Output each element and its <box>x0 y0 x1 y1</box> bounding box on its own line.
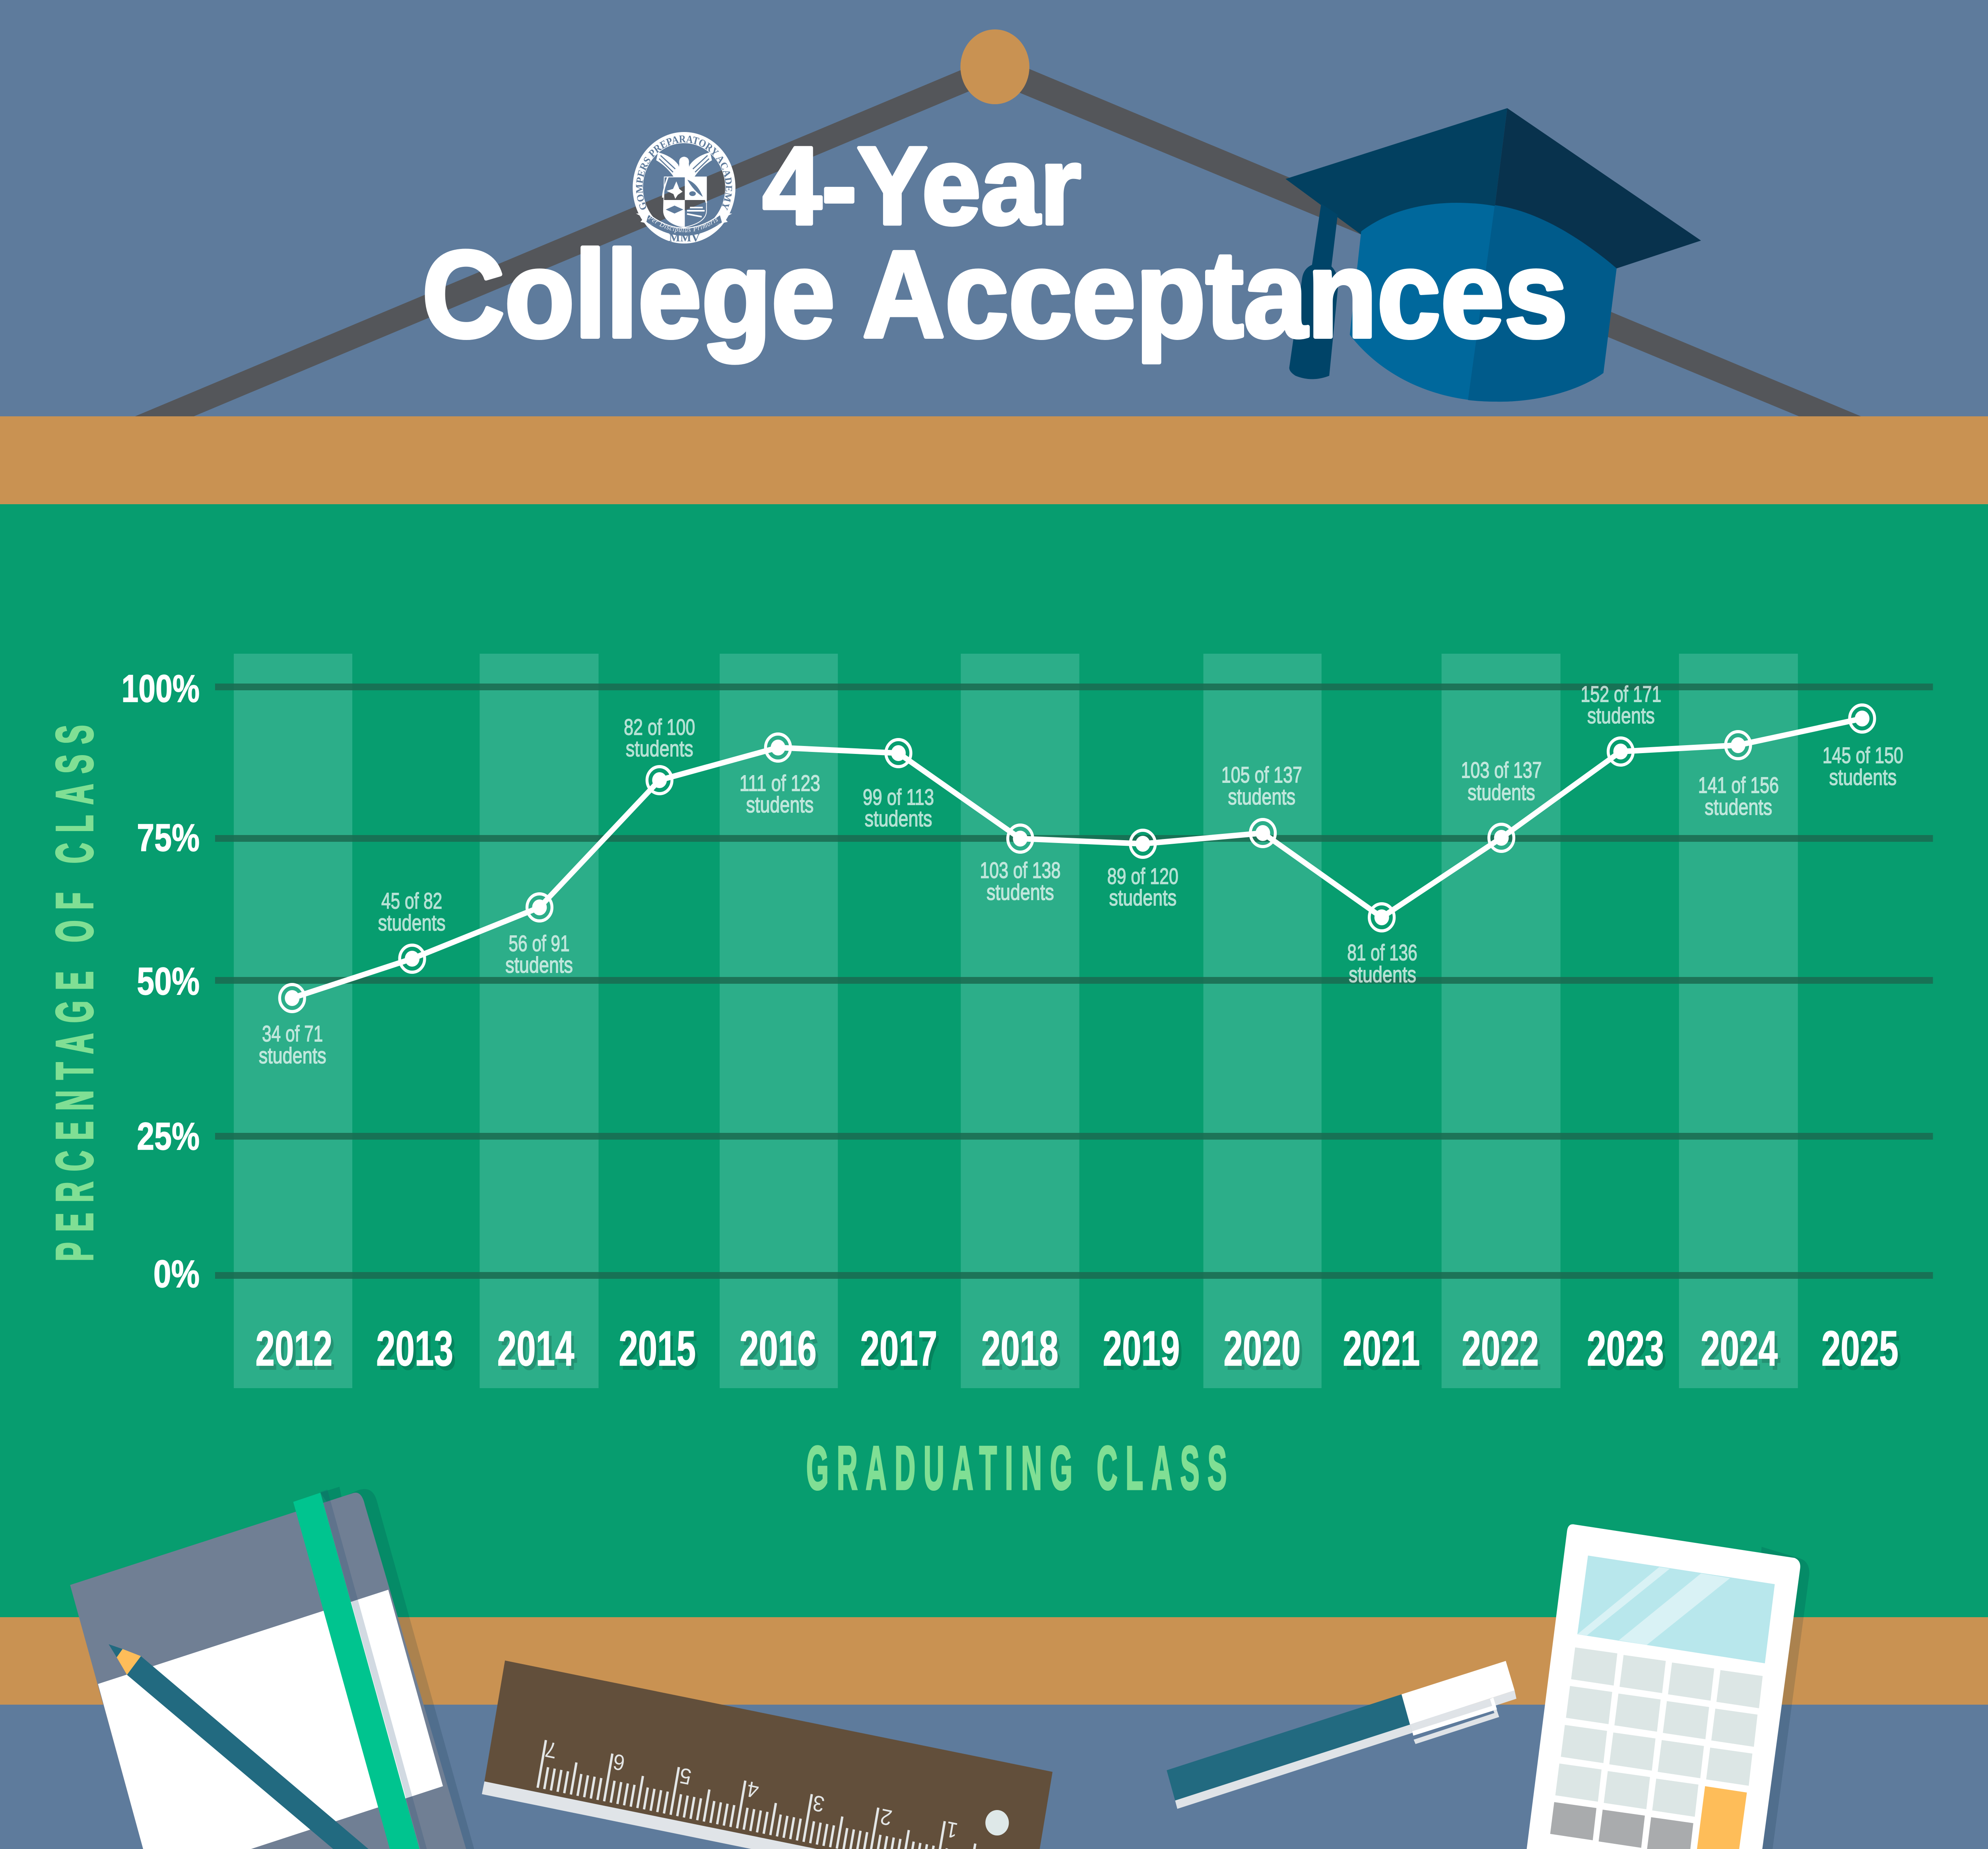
x axis year labels: 2013 <box>376 1321 453 1376</box>
x axis year labels: 2023 <box>1587 1321 1664 1376</box>
data labels: students accepted: students <box>746 792 813 817</box>
chart grid lines <box>215 684 1933 1279</box>
x axis year labels: 2018 <box>981 1321 1058 1376</box>
data labels: students accepted: 152 of 171 <box>1580 681 1662 707</box>
data labels: students accepted: students <box>505 952 573 977</box>
logo: Gompers Preparatory Academy seal: Per Discipulus Primoris <box>647 213 719 234</box>
x axis year labels: 2016 <box>742 1326 819 1381</box>
chalkboard top frame <box>0 416 1988 504</box>
y axis labels: 25% <box>137 1115 200 1158</box>
icon: ruler: 1 <box>944 1816 959 1843</box>
x axis year labels: 2022 <box>1462 1321 1539 1376</box>
x axis year labels: 2025 <box>1824 1326 1901 1381</box>
x axis year labels: 2018 <box>984 1326 1061 1381</box>
icon: graduation cap <box>1285 108 1701 402</box>
x axis year labels: 2025 <box>1821 1321 1899 1376</box>
data labels: students accepted: students <box>1705 794 1772 820</box>
x axis year labels: 2024 <box>1701 1321 1778 1376</box>
data labels: students accepted: students <box>378 910 446 935</box>
x axis year labels: 2017 <box>860 1321 937 1376</box>
x axis year labels: 2020 <box>1227 1326 1304 1381</box>
x axis year labels: 2014 <box>497 1321 575 1376</box>
data labels: students accepted: students <box>1109 885 1176 910</box>
data labels: students accepted: 145 of 150 <box>1823 742 1903 768</box>
data labels: students accepted: students <box>259 1043 326 1068</box>
data labels: students accepted: students <box>1228 784 1295 809</box>
icon: ruler: 3 <box>811 1790 826 1817</box>
data labels: students accepted: students <box>865 806 932 831</box>
data labels: students accepted: 105 of 137 <box>1221 762 1302 787</box>
hanging rope <box>135 64 1861 416</box>
x axis year labels: 2021 <box>1346 1326 1423 1381</box>
peg <box>961 29 1029 104</box>
chalkboard bottom frame <box>0 1617 1988 1705</box>
x axis year labels: 2015 <box>619 1321 696 1376</box>
data labels: students accepted: students <box>1468 779 1535 805</box>
data labels: students accepted: students <box>626 736 693 761</box>
icon: ruler <box>482 1661 1052 1849</box>
icon: notebook <box>70 1487 475 1849</box>
icon: ruler: 4 <box>745 1776 761 1803</box>
data labels: students accepted: 89 of 120 <box>1107 863 1178 889</box>
data labels: students accepted: students <box>1349 961 1416 987</box>
x axis year labels: 2022 <box>1465 1326 1542 1381</box>
title <box>422 124 1568 364</box>
data labels: students accepted: 103 of 137 <box>1461 757 1542 783</box>
y axis labels: 50% <box>137 960 200 1003</box>
icon: calculator <box>1527 1524 1809 1849</box>
logo: Gompers Preparatory Academy seal: MMV <box>669 231 700 244</box>
icon: ruler: 6 <box>611 1749 627 1775</box>
chalkboard surface <box>0 504 1988 1617</box>
x axis year labels: 2020 <box>1223 1321 1301 1376</box>
x axis year labels: 2023 <box>1590 1326 1667 1381</box>
x axis year labels: 2024 <box>1704 1326 1780 1381</box>
icon: pen <box>1167 1661 1516 1809</box>
y axis labels: 0% <box>153 1253 200 1295</box>
x axis year labels: 2012 <box>258 1326 336 1381</box>
line chart: acceptance percentage <box>280 705 1875 1012</box>
data labels: students accepted: 103 of 138 <box>980 857 1061 883</box>
data labels: students accepted: 45 of 82 <box>381 888 442 913</box>
data labels: students accepted: students <box>986 879 1054 905</box>
x axis year labels: 2021 <box>1343 1321 1420 1376</box>
title: College Acceptances <box>422 225 1568 364</box>
data labels: students accepted: 81 of 136 <box>1347 940 1417 965</box>
x axis year labels: 2017 <box>863 1326 940 1381</box>
data labels: students accepted: 82 of 100 <box>624 714 695 740</box>
y axis labels: 100% <box>122 667 200 710</box>
data labels: students accepted <box>259 681 1903 1068</box>
title: 4-Year <box>763 124 1081 247</box>
y axis labels <box>122 667 200 1295</box>
data labels: students accepted: students <box>1829 764 1897 790</box>
x axis year labels: 2013 <box>379 1326 456 1381</box>
x axis year labels: 2014 <box>500 1326 577 1381</box>
x axis title: GRADUATING CLASS <box>806 1433 1235 1502</box>
data labels: students accepted: 34 of 71 <box>262 1021 323 1046</box>
icon: ruler: 5 <box>678 1763 693 1789</box>
x axis year labels <box>255 1321 1901 1381</box>
data labels: students accepted: 99 of 113 <box>863 784 934 810</box>
y axis labels: 75% <box>137 816 200 859</box>
x axis year labels: 2019 <box>1103 1321 1180 1376</box>
icon: ruler: 7 <box>544 1736 559 1763</box>
icon: ruler: 2 <box>878 1804 894 1830</box>
chart column bands <box>234 654 1798 1388</box>
x axis year labels: 2019 <box>1106 1326 1183 1381</box>
x axis year labels: 2016 <box>740 1321 817 1376</box>
data labels: students accepted: 56 of 91 <box>509 930 570 956</box>
logo: Gompers Preparatory Academy seal: GOMPERS PREPARATORY ACADEMY <box>634 133 734 212</box>
x axis year labels: 2015 <box>622 1326 699 1381</box>
y axis title: PERCENTAGE OF CLASS <box>45 715 103 1261</box>
x axis year labels: 2012 <box>255 1321 332 1376</box>
data labels: students accepted: 141 of 156 <box>1698 772 1779 798</box>
data labels: students accepted: students <box>1587 703 1655 728</box>
data labels: students accepted: 111 of 123 <box>740 770 820 796</box>
